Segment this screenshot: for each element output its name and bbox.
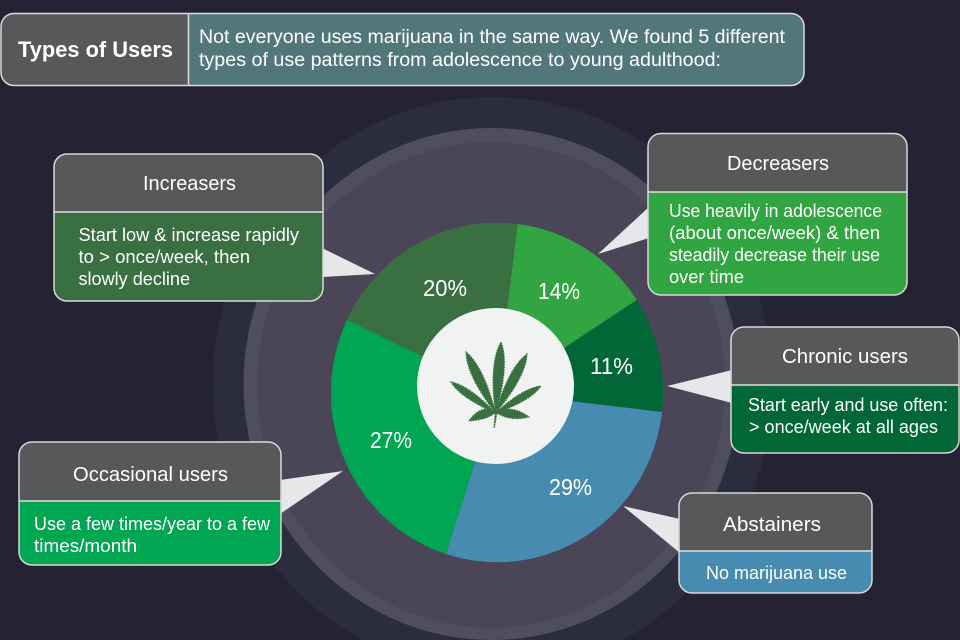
pointer arrow	[598, 207, 649, 254]
heading: Decreasers	[727, 153, 829, 175]
description	[669, 200, 882, 287]
slice: chronic users 11%	[497, 300, 663, 412]
label: 27%: 27%	[370, 427, 412, 453]
pointer arrow	[280, 471, 343, 514]
slice: increasers 20%	[347, 223, 518, 392]
description: to > once/week, then	[78, 246, 250, 267]
title banner	[1, 14, 804, 86]
description: (about once/week) & then	[669, 222, 880, 243]
heading: Types of Users: Types of Users	[18, 37, 173, 62]
callout: chronic users	[667, 327, 959, 453]
description: Start low & increase rapidly	[78, 224, 300, 245]
description: > once/week at all ages	[749, 416, 938, 437]
description	[748, 394, 948, 437]
donut chart: user type shares	[331, 223, 663, 562]
callout: increasers	[54, 154, 375, 301]
pointer arrow	[623, 506, 680, 553]
label: 20%: 20%	[423, 275, 467, 301]
heading: Increasers	[143, 173, 236, 195]
slice: decreasers 14%	[497, 224, 637, 392]
background concentric rings	[213, 97, 773, 640]
slice: abstainers 29%	[446, 392, 662, 562]
slice: occasional users 27%	[331, 320, 497, 554]
label: 14%: 14%	[538, 278, 580, 304]
description: times/month	[34, 535, 137, 556]
description: Use heavily in adolescence	[669, 200, 882, 221]
intro text	[199, 27, 786, 71]
description	[34, 513, 271, 556]
description: over time	[669, 266, 744, 287]
label: 11%: 11%	[590, 353, 633, 379]
intro text: Not everyone uses marijuana in the same way. We found 5 different	[199, 27, 786, 48]
callout: decreasers	[598, 134, 907, 295]
donut center circle	[417, 308, 574, 464]
description: No marijuana use	[706, 562, 847, 583]
callout: occasional users	[19, 442, 343, 565]
heading: Chronic users	[782, 346, 908, 368]
description: slowly decline	[78, 268, 190, 289]
label: 29%: 29%	[549, 474, 592, 500]
pointer arrow	[667, 370, 732, 403]
icon: cannabis leaf	[451, 342, 541, 427]
heading: Abstainers	[723, 514, 821, 536]
callout: abstainers	[623, 493, 872, 593]
pointer arrow	[322, 248, 375, 277]
description: Use a few times/year to a few	[34, 513, 271, 534]
description: steadily decrease their use	[669, 244, 880, 265]
description	[78, 224, 300, 289]
intro text: types of use patterns from adolescence to young adulthood:	[199, 50, 721, 71]
description: Start early and use often:	[748, 394, 948, 415]
heading: Occasional users	[73, 464, 228, 486]
